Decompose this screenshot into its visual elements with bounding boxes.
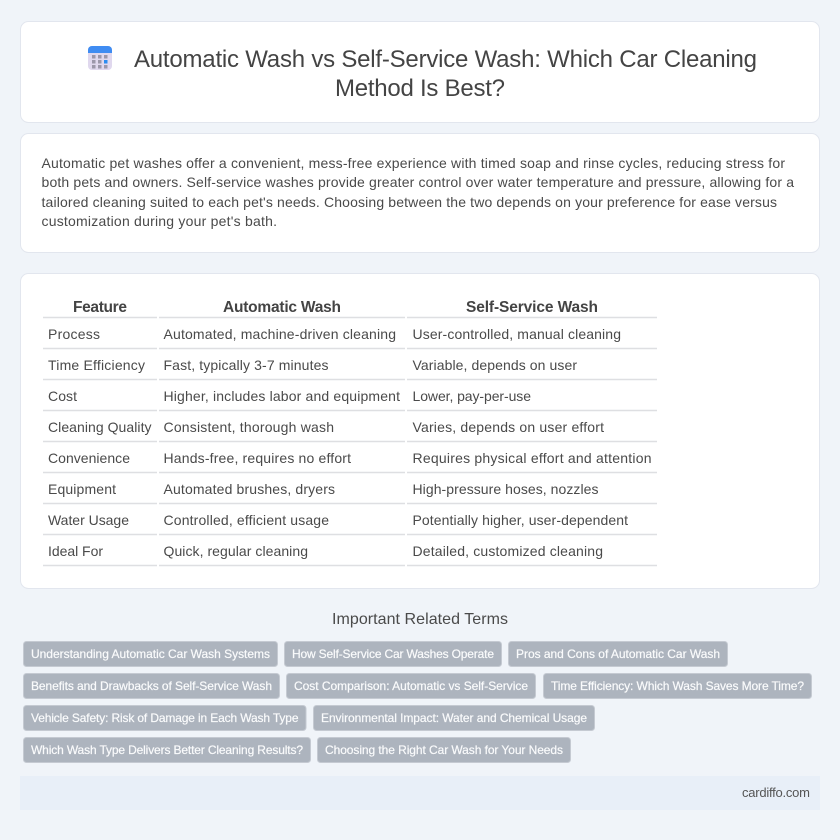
panel: introduction text: tailored cleaning suited to each pet's needs. Choosing between the two depends on your preference for ease versus [42,194,777,210]
row: time efficiency: Variable, depends on user [412,357,577,373]
row: equipment [48,481,598,497]
tag: Benefits and Drawbacks of Self-Service Wash [31,679,272,693]
row: equipment: Automated brushes, dryers [164,481,335,497]
row: ideal for: Ideal For [48,543,103,559]
row: ideal for: Detailed, customized cleaning [412,543,603,559]
title: Automatic Wash vs Self-Service Wash: Which Car Cleaning [134,46,757,73]
tag: Pros and Cons of Automatic Car Wash [516,647,720,661]
row: time efficiency [48,357,577,373]
row: water usage [48,512,628,528]
tag [318,738,570,762]
tag [314,706,594,730]
tag [508,642,728,666]
tag: Vehicle Safety: Risk of Damage in Each Wash Type [31,711,299,725]
row: time efficiency: Time Efficiency [48,357,145,373]
panel: header [20,22,820,122]
footer: cardiffo.com [742,785,810,800]
tag: Time Efficiency: Which Wash Saves More Time? [551,679,804,693]
tag: Environmental Impact: Water and Chemical Usage [321,711,587,725]
row: equipment: Equipment [48,481,116,497]
row: cleaning quality: Consistent, thorough wash [164,419,334,435]
table header row: Self-Service Wash [466,299,598,316]
tag [24,706,306,730]
tag [544,674,812,698]
row: process: User-controlled, manual cleaning [412,326,621,342]
icon: calendar grid [88,46,112,70]
footer [20,776,820,810]
row: cost: Higher, includes labor and equipment [164,388,400,404]
tag [24,738,310,762]
tag: How Self-Service Car Washes Operate [292,647,494,661]
tag [24,642,278,666]
tag: Cost Comparison: Automatic vs Self-Service [294,679,528,693]
row: water usage: Controlled, efficient usage [164,512,329,528]
panel: comparison table [20,274,820,588]
panel: introduction text [20,134,820,252]
panel: introduction text: customization during your pet's bath. [42,213,277,229]
tag: Choosing the Right Car Wash for Your Needs [325,743,563,757]
table header row: Automatic Wash [223,299,341,316]
panel: introduction text: both pets and owners. Self-service washes provide greater control over water temperature and pressure, allowing for a [42,174,794,190]
row: convenience: Requires physical effort and attention [412,450,652,466]
tag [286,674,536,698]
tag [284,642,502,666]
table header row [73,299,598,316]
tag [24,674,280,698]
row: equipment: High-pressure hoses, nozzles [412,481,598,497]
title [134,46,757,102]
table header row: Feature [73,299,127,316]
tag: Understanding Automatic Car Wash Systems [31,647,270,661]
row: ideal for [48,543,603,559]
tag list: related terms [24,642,812,762]
row: convenience [48,450,652,466]
row: time efficiency: Fast, typically 3-7 minutes [164,357,328,373]
row: water usage: Potentially higher, user-dependent [412,512,628,528]
heading: related terms: Important Related Terms [332,611,508,628]
row: cleaning quality: Cleaning Quality [48,419,152,435]
row: cost: Cost [48,388,77,404]
row: ideal for: Quick, regular cleaning [164,543,308,559]
row: process [48,326,621,342]
row: water usage: Water Usage [48,512,129,528]
panel: introduction text: Automatic pet washes offer a convenient, mess-free experience with timed soap and rinse cycles, reducing stress for [42,155,785,171]
row: cleaning quality [48,419,604,435]
row: convenience: Convenience [48,450,130,466]
title: Method Is Best? [335,75,505,102]
row: process: Process [48,326,100,342]
row: convenience: Hands-free, requires no effort [164,450,351,466]
row: cost [48,388,531,404]
tag: Which Wash Type Delivers Better Cleaning Results? [31,743,303,757]
row: process: Automated, machine-driven cleaning [164,326,396,342]
row: cost: Lower, pay-per-use [412,388,531,404]
row: cleaning quality: Varies, depends on user effort [412,419,604,435]
